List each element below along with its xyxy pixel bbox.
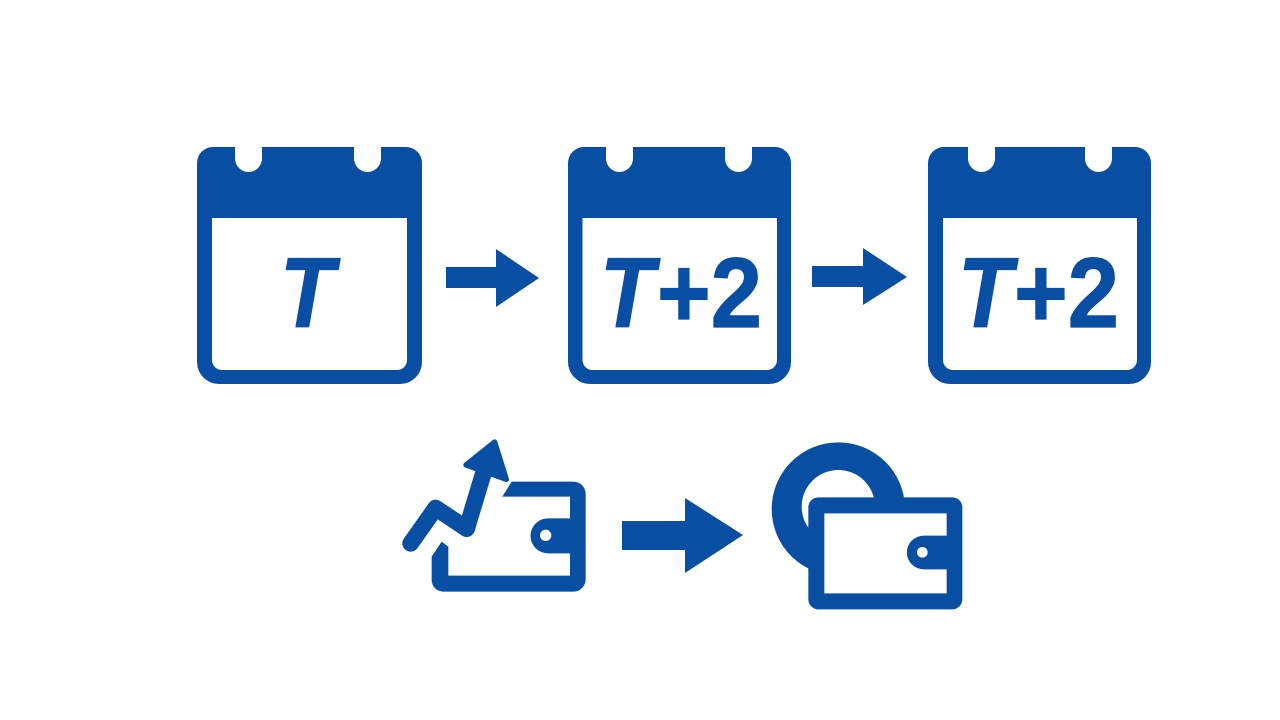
icon: calendar T [197,147,422,384]
icon: wallet with rising arrow [411,442,586,592]
icon: calendar T+2 (second): T [958,237,1019,348]
icon: wallet with coin [772,442,962,609]
wallet body [808,497,962,609]
icon: calendar T: T [280,237,341,348]
icon: calendar T+2 (first): T [600,237,661,348]
wallet interior [817,505,953,602]
icon: calendar T+2 (first) [568,147,791,384]
wallet body [432,482,586,592]
arrow: growth wallet to cash wallet [622,498,743,573]
icon: calendar T+2 (first): +2 [657,237,762,348]
icon: calendar T+2 (second): +2 [1014,237,1119,348]
rising trend arrow [411,442,506,543]
arrow: T to first T+2 [446,249,539,307]
coin [772,442,905,576]
icon: calendar T+2 (second) [928,147,1151,384]
arrow: first T+2 to second T+2 [812,248,907,305]
